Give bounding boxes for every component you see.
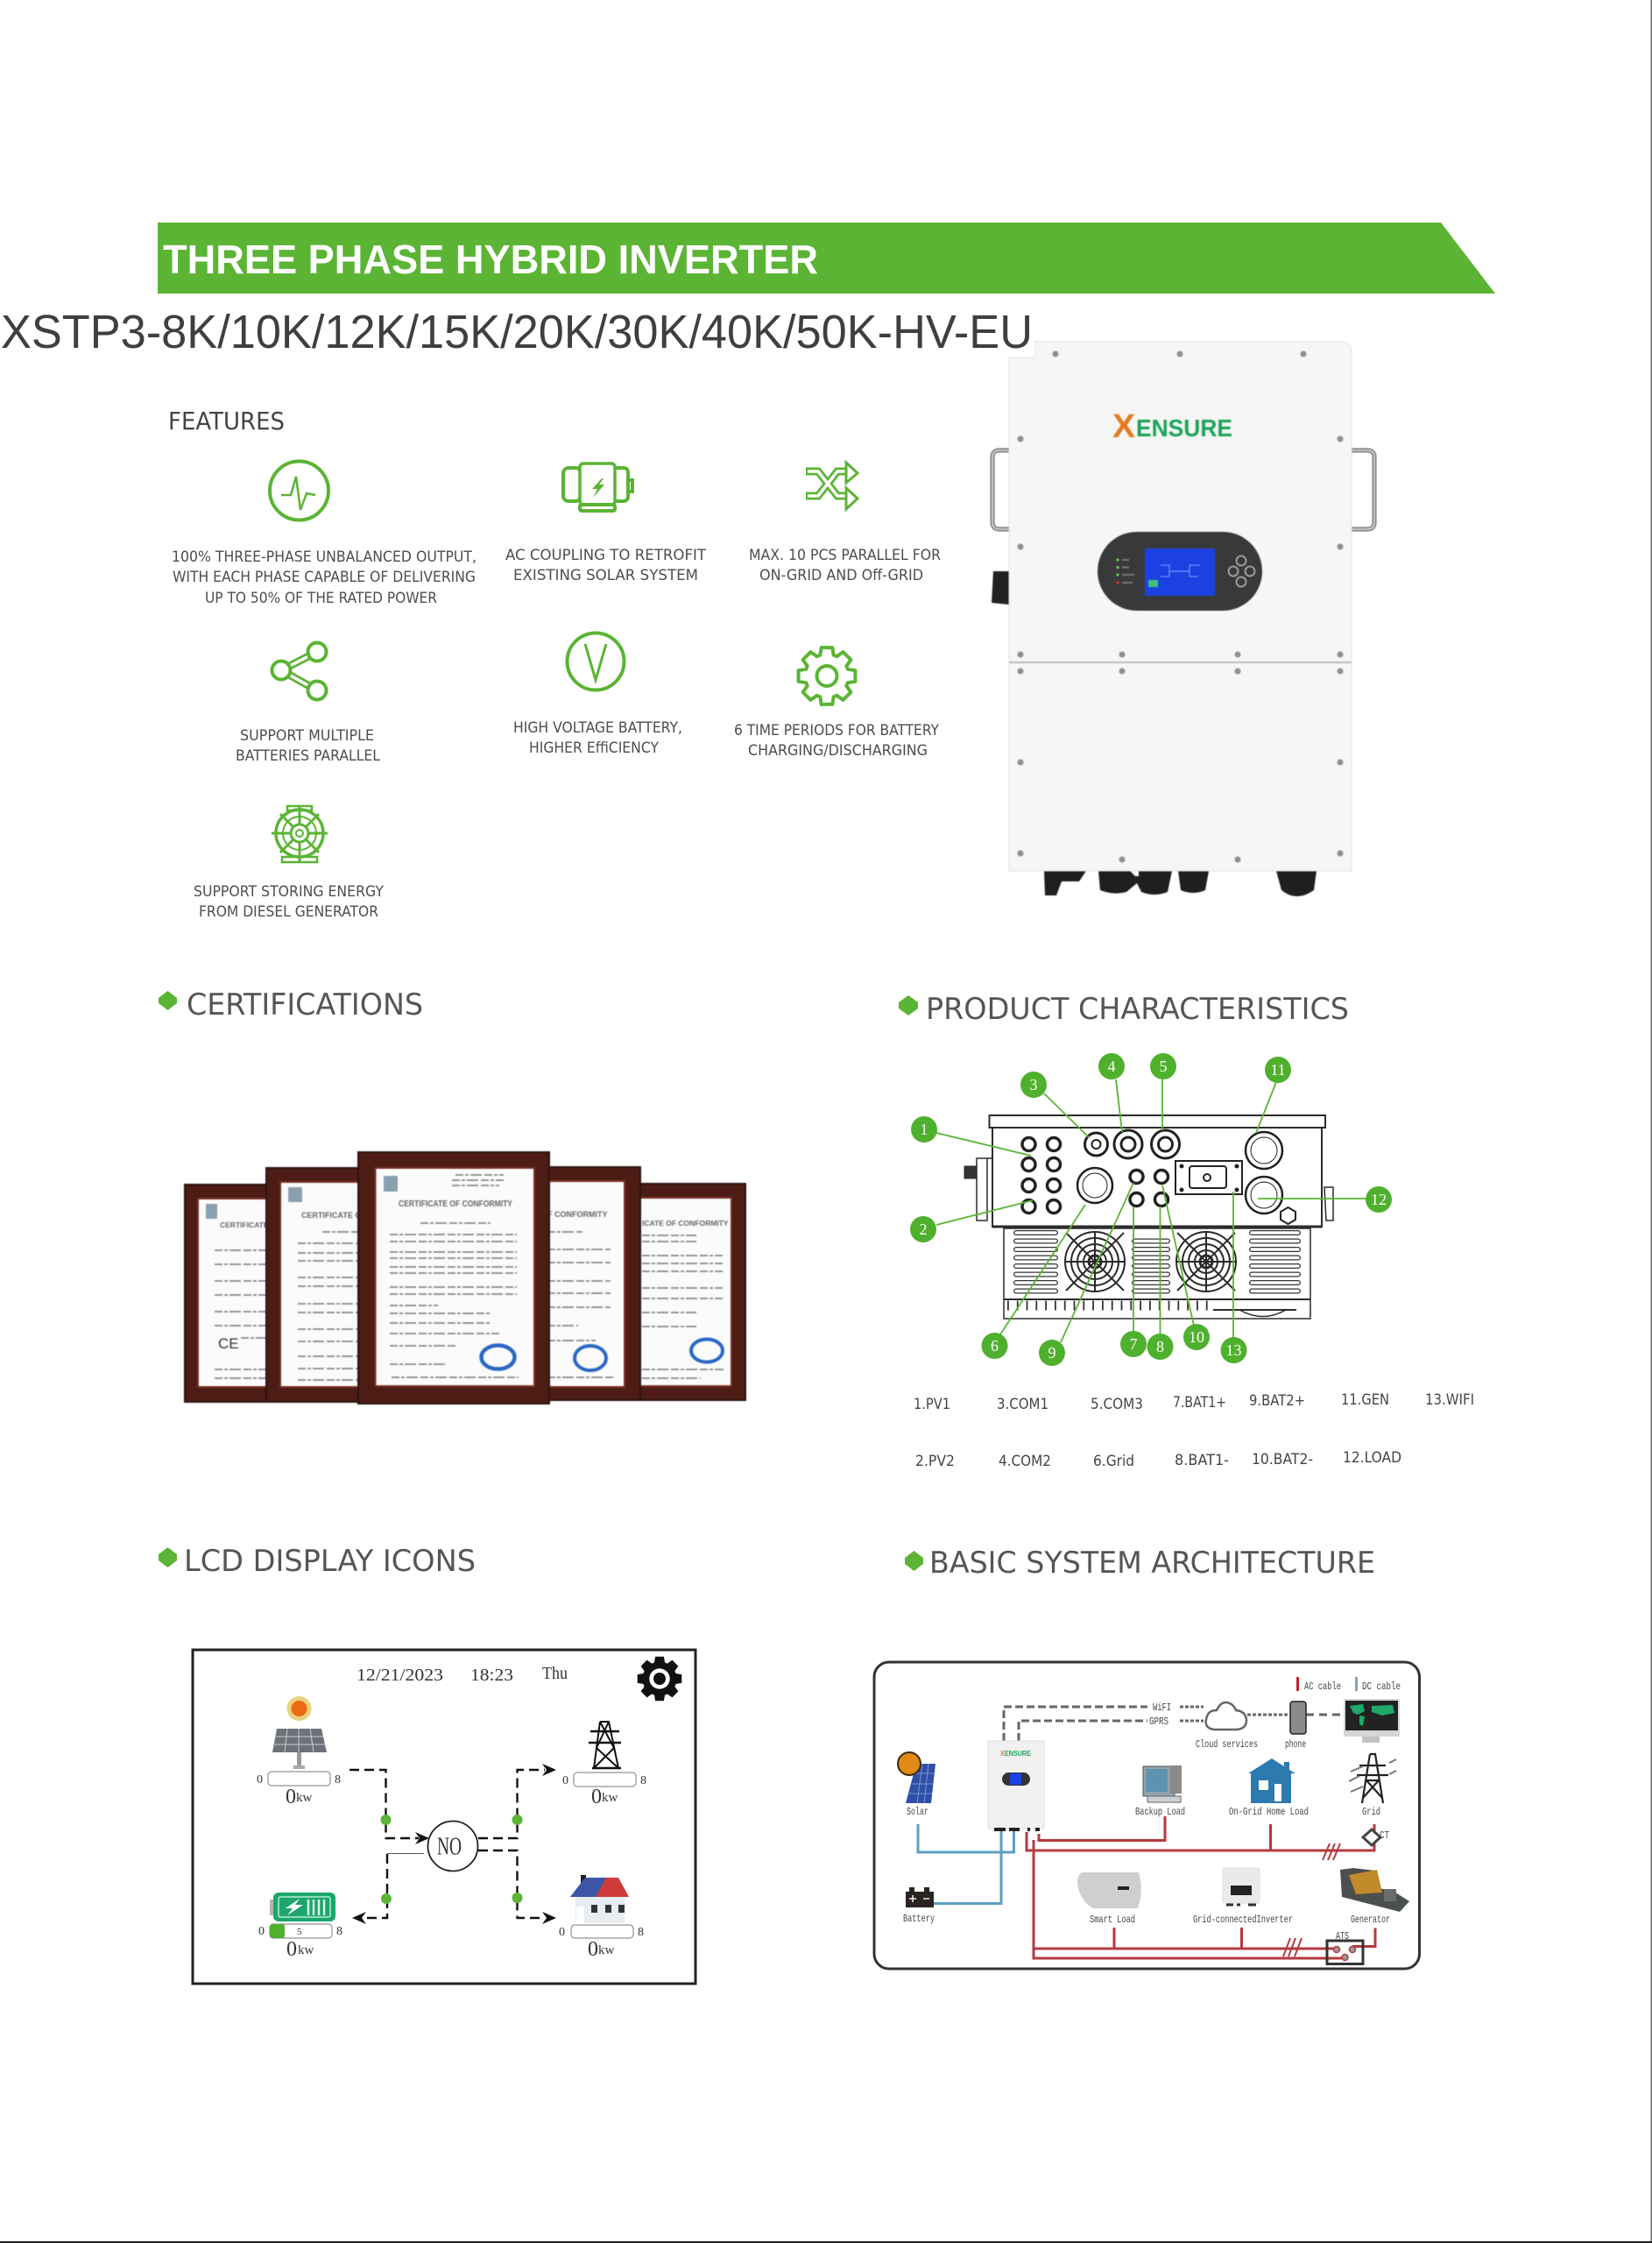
certificate frame 1 [185, 1185, 290, 1402]
feature: high voltage battery [513, 633, 682, 757]
feature: three-phase unbalanced output: WITH EACH PHASE CAPABLE OF DELIVERING [173, 569, 476, 586]
panel: basic system architecture [874, 1662, 1419, 1969]
certificates image [185, 1152, 745, 1404]
icon: monitor [1344, 1699, 1400, 1743]
feature: multiple batteries [236, 643, 380, 765]
icon: solar [898, 1752, 935, 1818]
port legend: 5.COM3 [1091, 1396, 1143, 1412]
brand logo: ENSURE [1136, 414, 1232, 442]
port legend: 8.BAT1- [1175, 1452, 1229, 1468]
numbered callouts: 6 [991, 1337, 999, 1355]
battery gauge: 5 [297, 1927, 302, 1937]
fins [1007, 1300, 1211, 1311]
feature: parallel [749, 463, 941, 584]
product photo: inverter [992, 342, 1374, 896]
ports [1022, 1130, 1295, 1224]
icon: smart load [1077, 1872, 1141, 1926]
bottom connectors [1044, 871, 1317, 896]
port legend: 2.PV2 [915, 1453, 955, 1469]
icon: solar panel [272, 1696, 327, 1769]
title banner [158, 223, 1495, 294]
icon: backup load [1135, 1765, 1185, 1818]
port legend [914, 1391, 1474, 1469]
certificate frame 2 [266, 1168, 367, 1402]
numbered callouts: 1 [920, 1121, 928, 1138]
communication links [1004, 1707, 1343, 1741]
grid gauge: kw [602, 1791, 618, 1805]
home gauge: kw [598, 1943, 615, 1957]
battery gauge: kw [298, 1943, 314, 1957]
numbered callouts: 12 [1371, 1191, 1387, 1208]
numbered callouts [910, 1053, 1392, 1366]
icon: on-grid home load: On-Grid Home Load [1229, 1806, 1309, 1818]
WiFi and GPRS labels [1149, 1702, 1171, 1728]
numbered callouts: 3 [1030, 1076, 1037, 1093]
CT sensor: CT [1380, 1829, 1389, 1842]
certificate frame 1: CERTIFICATE [220, 1221, 269, 1229]
port legend: 4.COM2 [999, 1453, 1051, 1469]
feature: high voltage battery: HIGH VOLTAGE BATTERY, [513, 719, 682, 737]
title banner: THREE PHASE HYBRID INVERTER [163, 237, 818, 282]
numbered callouts: 7 [1130, 1335, 1137, 1353]
port legend: 7.BAT1+ [1173, 1394, 1226, 1411]
feature: three-phase unbalanced output: 100% THREE-PHASE UNBALANCED OUTPUT, [172, 548, 477, 566]
certificate frame 3 (front) [358, 1152, 549, 1404]
inverter status circle [427, 1821, 478, 1872]
icon: cloud services: Cloud services [1196, 1738, 1258, 1751]
icon: grid: Grid [1362, 1806, 1380, 1818]
feature: three-phase unbalanced output: UP TO 50% OF THE RATED POWER [205, 590, 437, 607]
heading: LCD display icons: LCD DISPLAY ICONS [184, 1544, 476, 1579]
battery gauge: 0 [258, 1925, 265, 1938]
panel: LCD display [193, 1650, 695, 1984]
certificate frame 2: CERTIFICATE O [301, 1211, 361, 1220]
certificate frame 3 (front): CERTIFICATE OF CONFORMITY [399, 1199, 512, 1209]
feature: diesel generator [194, 806, 385, 921]
ATS switch [1327, 1930, 1363, 1964]
fans [1064, 1231, 1237, 1292]
screws [1018, 350, 1344, 862]
feature: high voltage battery: HIGHER EffiCIENCY [529, 739, 660, 757]
icon: backup load: Backup Load [1135, 1806, 1185, 1818]
cable legend: AC cable [1304, 1680, 1341, 1693]
port legend: 9.BAT2+ [1249, 1392, 1305, 1409]
icon: generator: Generator [1351, 1914, 1390, 1926]
icon: hybrid inverter [988, 1741, 1044, 1829]
icon: house [570, 1875, 629, 1923]
panel: features [168, 407, 941, 921]
numbered callouts: 10 [1189, 1328, 1204, 1346]
icon: battery [903, 1887, 935, 1925]
port legend: 3.COM1 [997, 1396, 1048, 1412]
port legend: 11.GEN [1341, 1391, 1389, 1408]
feature: parallel: MAX. 10 PCS PARALLEL FOR [749, 547, 941, 564]
feature: six time periods: CHARGING/DISCHARGING [748, 742, 928, 760]
home gauge: 0 [559, 1926, 565, 1939]
battery gauge: 8 [336, 1925, 342, 1938]
heading: certifications: CERTIFICATIONS [187, 987, 423, 1022]
icon: hybrid inverter: XENSURE [1000, 1750, 1032, 1758]
certificate frame 1: CE [218, 1335, 239, 1352]
feature: AC coupling [505, 463, 707, 584]
date and time: 12/21/2023 [357, 1666, 443, 1685]
numbered callouts: 5 [1160, 1058, 1167, 1075]
icon: phone [1285, 1702, 1306, 1751]
icon: generator [1340, 1868, 1409, 1926]
brand logo: X [1112, 408, 1136, 445]
feature: parallel: ON-GRID AND Off-GRID [759, 567, 923, 584]
inverter status circle: NO [437, 1833, 462, 1861]
solar gauge: 0 [286, 1786, 296, 1808]
port legend: 10.BAT2- [1252, 1451, 1313, 1468]
feature: three-phase unbalanced output [172, 461, 477, 607]
features heading: FEATURES [168, 407, 285, 435]
icon: settings gear [638, 1657, 681, 1701]
feature: AC coupling: AC COUPLING TO RETROFIT [505, 547, 707, 564]
port legend: 6.Grid [1093, 1453, 1134, 1469]
brand logo [1112, 408, 1232, 445]
numbered callouts: 2 [920, 1221, 927, 1238]
ATS switch: ATS [1336, 1930, 1349, 1942]
certificate frame 5 [631, 1184, 745, 1400]
solar gauge [257, 1772, 341, 1808]
date and time: Thu [542, 1664, 568, 1683]
feature: multiple batteries: SUPPORT MULTIPLE [240, 727, 374, 745]
certificate frame 4: F CONFORMITY [547, 1210, 608, 1219]
grid gauge: 0 [562, 1774, 568, 1787]
port legend: 1.PV1 [914, 1396, 950, 1412]
solar gauge: kw [296, 1791, 312, 1805]
numbered callouts: 8 [1156, 1338, 1164, 1355]
grid gauge: 0 [591, 1786, 602, 1808]
icon: grid [1349, 1754, 1396, 1818]
home gauge [559, 1925, 644, 1961]
grid gauge: 8 [640, 1774, 646, 1787]
numbered callouts: 13 [1226, 1341, 1242, 1359]
icon: grid-connected inverter: Grid-connectedInverter [1193, 1914, 1293, 1926]
feature: diesel generator: FROM DIESEL GENERATOR [199, 903, 378, 921]
icon: battery [270, 1893, 335, 1921]
feature: six time periods: 6 TIME PERIODS FOR BATTERY [734, 722, 940, 739]
port legend: 12.LOAD [1343, 1449, 1401, 1466]
icon: grid-connected inverter [1193, 1868, 1293, 1926]
WiFi and GPRS labels: WiFI [1153, 1702, 1171, 1714]
date and time: 18:23 [470, 1666, 513, 1685]
port legend: 13.WIFI [1425, 1391, 1474, 1408]
home gauge: 8 [638, 1926, 644, 1939]
certificate frame 5: ICATE OF CONFORMITY [642, 1219, 729, 1228]
CT sensor [1363, 1829, 1389, 1845]
certificate frame 4 [539, 1167, 640, 1400]
icon: phone: phone [1285, 1738, 1306, 1751]
vents [1016, 1233, 1298, 1291]
heading: basic system architecture: BASIC SYSTEM ARCHITECTURE [929, 1546, 1375, 1581]
feature: AC coupling: EXISTING SOLAR SYSTEM [513, 567, 698, 584]
numbered callouts: 4 [1107, 1058, 1116, 1075]
home gauge: 0 [588, 1938, 598, 1961]
heading: product characteristics: PRODUCT CHARACTERISTICS [926, 992, 1349, 1027]
solar gauge: 8 [335, 1773, 341, 1787]
numbered callouts: 9 [1048, 1344, 1056, 1362]
control panel [1098, 532, 1262, 611]
solar gauge: 0 [257, 1773, 263, 1787]
WiFi and GPRS labels: GPRS [1149, 1716, 1168, 1728]
date and time [357, 1664, 568, 1685]
feature: multiple batteries: BATTERIES PARALLEL [236, 747, 380, 765]
power flow arrows [349, 1764, 556, 1924]
icon: cloud services [1196, 1702, 1258, 1751]
panel: product characteristics diagram [910, 1053, 1474, 1469]
cable legend [1296, 1677, 1401, 1693]
side switch [992, 571, 1009, 605]
AC cables [1027, 1816, 1375, 1958]
cable legend: DC cable [1362, 1680, 1401, 1693]
feature: six time periods [734, 647, 940, 760]
battery gauge: 0 [286, 1938, 297, 1961]
feature: diesel generator: SUPPORT STORING ENERGY [194, 883, 385, 901]
handles [992, 450, 1374, 529]
numbered callouts: 11 [1270, 1061, 1286, 1079]
icon: solar: Solar [907, 1806, 928, 1818]
grid gauge [562, 1772, 646, 1808]
leader lines [936, 1079, 1366, 1342]
icon: smart load: Smart Load [1090, 1914, 1135, 1926]
enclosure [1009, 342, 1352, 871]
icon: battery: Battery [903, 1913, 935, 1925]
battery gauge [258, 1924, 342, 1961]
icon: grid tower [589, 1722, 621, 1768]
model number heading: XSTP3-8K/10K/12K/15K/20K/30K/40K/50K-HV-EU [1, 306, 1033, 358]
DC cables [918, 1824, 1014, 1903]
icon: on-grid home load [1229, 1758, 1309, 1818]
inverter bottom drawing [964, 1115, 1333, 1319]
